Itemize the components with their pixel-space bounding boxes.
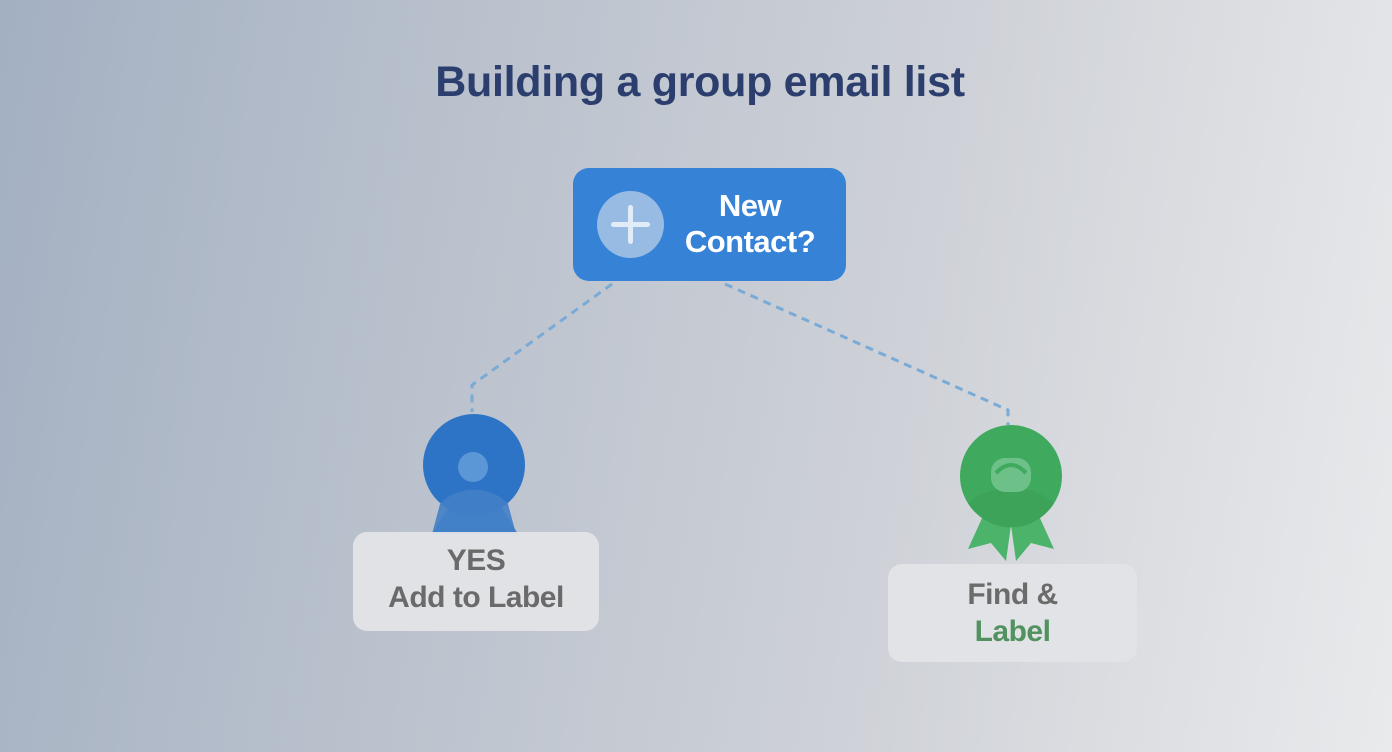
node text: Contact? [685, 224, 815, 259]
box: Find & Label: Label [975, 615, 1050, 648]
box: YES Add to Label: Add to Label [388, 581, 564, 614]
box: Find & Label: Find & [967, 578, 1058, 611]
icon: person (yes branch) [423, 414, 525, 532]
box: YES Add to Label: YES [447, 544, 505, 577]
node text [685, 188, 815, 259]
decision node: New Contact? [573, 168, 846, 281]
icon: plus [597, 191, 664, 258]
box: YES Add to Label [353, 532, 599, 631]
node text: New [719, 188, 781, 223]
icon: award badge (find branch) [960, 425, 1062, 561]
box: Find & Label [888, 564, 1137, 662]
title: Building a group email list [435, 58, 965, 106]
